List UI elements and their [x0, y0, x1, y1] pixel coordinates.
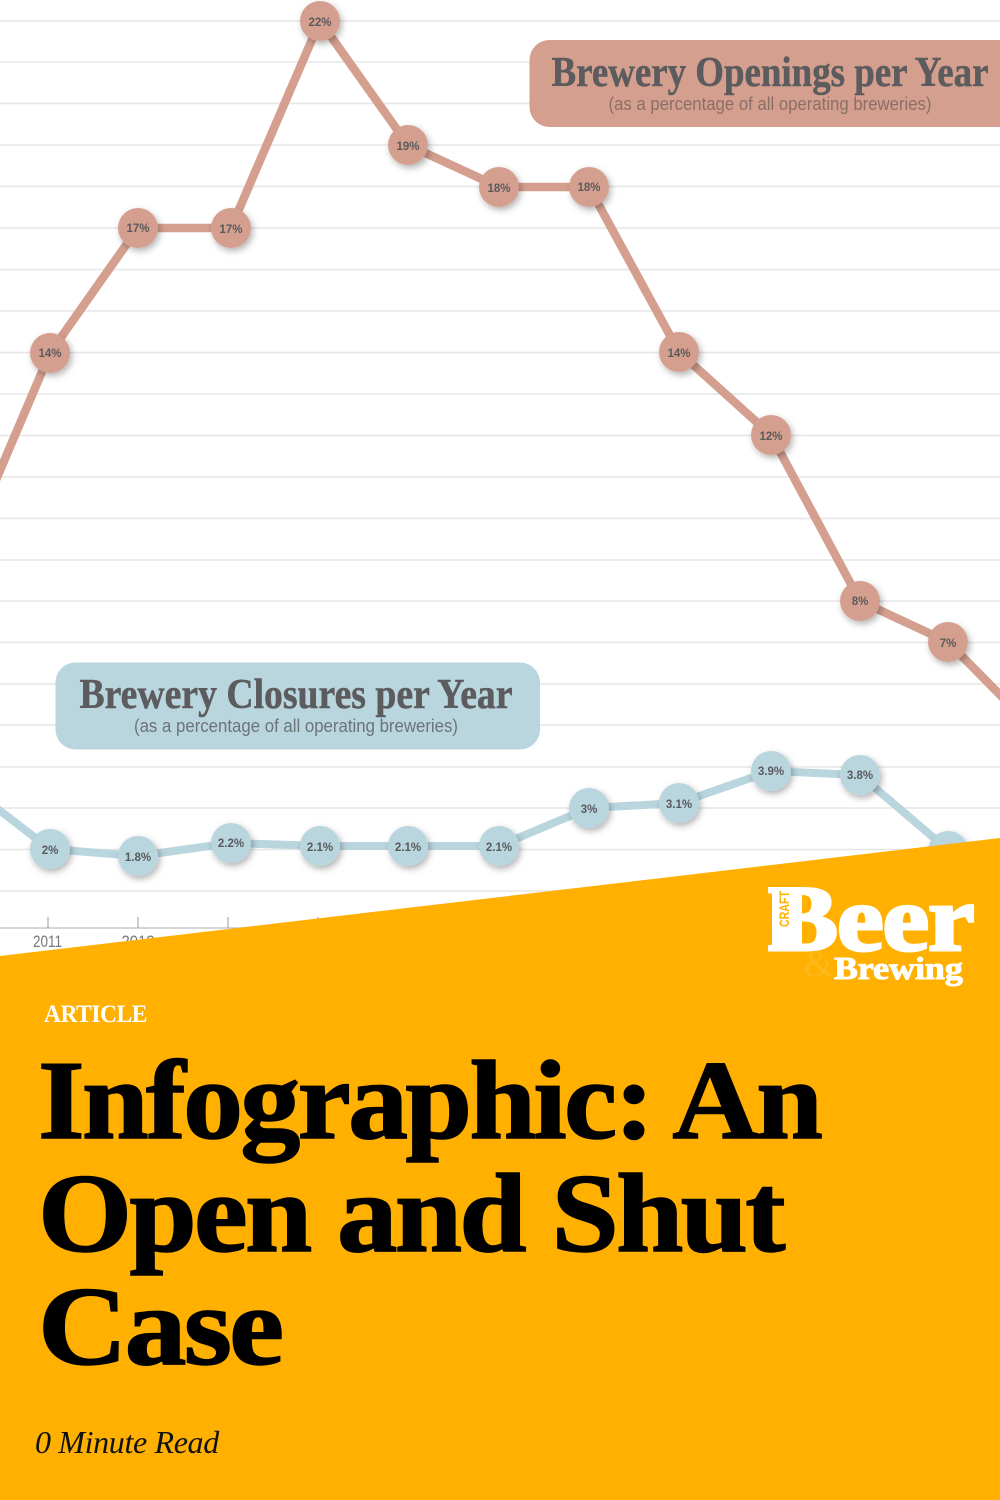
closures series: [0, 751, 968, 876]
closures series: 2.1%: [395, 842, 421, 854]
closures series: 3.1%: [666, 799, 692, 811]
closures series: 2.1%: [307, 842, 333, 854]
legend: brewery closures: (as a percentage of all operating breweries): [134, 716, 458, 736]
x axis with year labels: [0, 917, 1000, 951]
closures series: 3.9%: [758, 766, 784, 778]
yellow title panel: [0, 838, 1000, 1500]
main title: [41, 1058, 822, 1366]
closures series: 2.2%: [218, 838, 244, 850]
x axis with year labels: 2012: [122, 932, 154, 951]
logo word: Brewing: Brewing: [834, 950, 963, 986]
openings series: 14%: [38, 348, 62, 360]
line chart: brewery openings and closures: [0, 0, 1000, 951]
openings series: 17%: [219, 224, 243, 236]
legend: brewery openings: [530, 40, 1000, 127]
closures series: 3.8%: [847, 770, 873, 782]
legend: brewery closures: [56, 662, 540, 750]
read time: 0 Minute Read: [35, 1424, 219, 1460]
x axis with year labels: 2011: [33, 932, 62, 951]
main title: Infographic: An: [38, 1039, 820, 1163]
logo word: Craft: CRAFT: [776, 891, 792, 927]
closures series: 3%: [581, 804, 597, 816]
main title: Case: [38, 1265, 281, 1389]
logo word: Beer: Beer: [768, 868, 974, 971]
openings series: 7%: [940, 638, 956, 650]
openings series: [0, 1, 1000, 705]
legend: brewery openings: (as a percentage of all operating breweries): [608, 94, 932, 114]
openings series: 18%: [487, 183, 511, 195]
closures series: 1.8%: [125, 852, 151, 864]
openings series: 17%: [126, 223, 150, 235]
closures series: 2.1%: [486, 842, 512, 854]
main title: Open and Shut: [38, 1152, 783, 1276]
openings series: 22%: [308, 17, 332, 29]
logo ampersand: &: [804, 943, 834, 985]
closures series: 2%: [42, 845, 58, 857]
legend: brewery closures: Brewery Closures per Year: [80, 672, 512, 718]
openings series: 19%: [396, 141, 420, 153]
openings series: 14%: [667, 348, 691, 360]
openings series: 12%: [759, 431, 783, 443]
logo: white stem behind Craft: [772, 894, 802, 945]
openings series: 8%: [852, 596, 868, 608]
logo: Craft Beer & Brewing: [768, 887, 974, 986]
openings series: 18%: [577, 182, 601, 194]
label: article: ARTICLE: [44, 1001, 147, 1028]
